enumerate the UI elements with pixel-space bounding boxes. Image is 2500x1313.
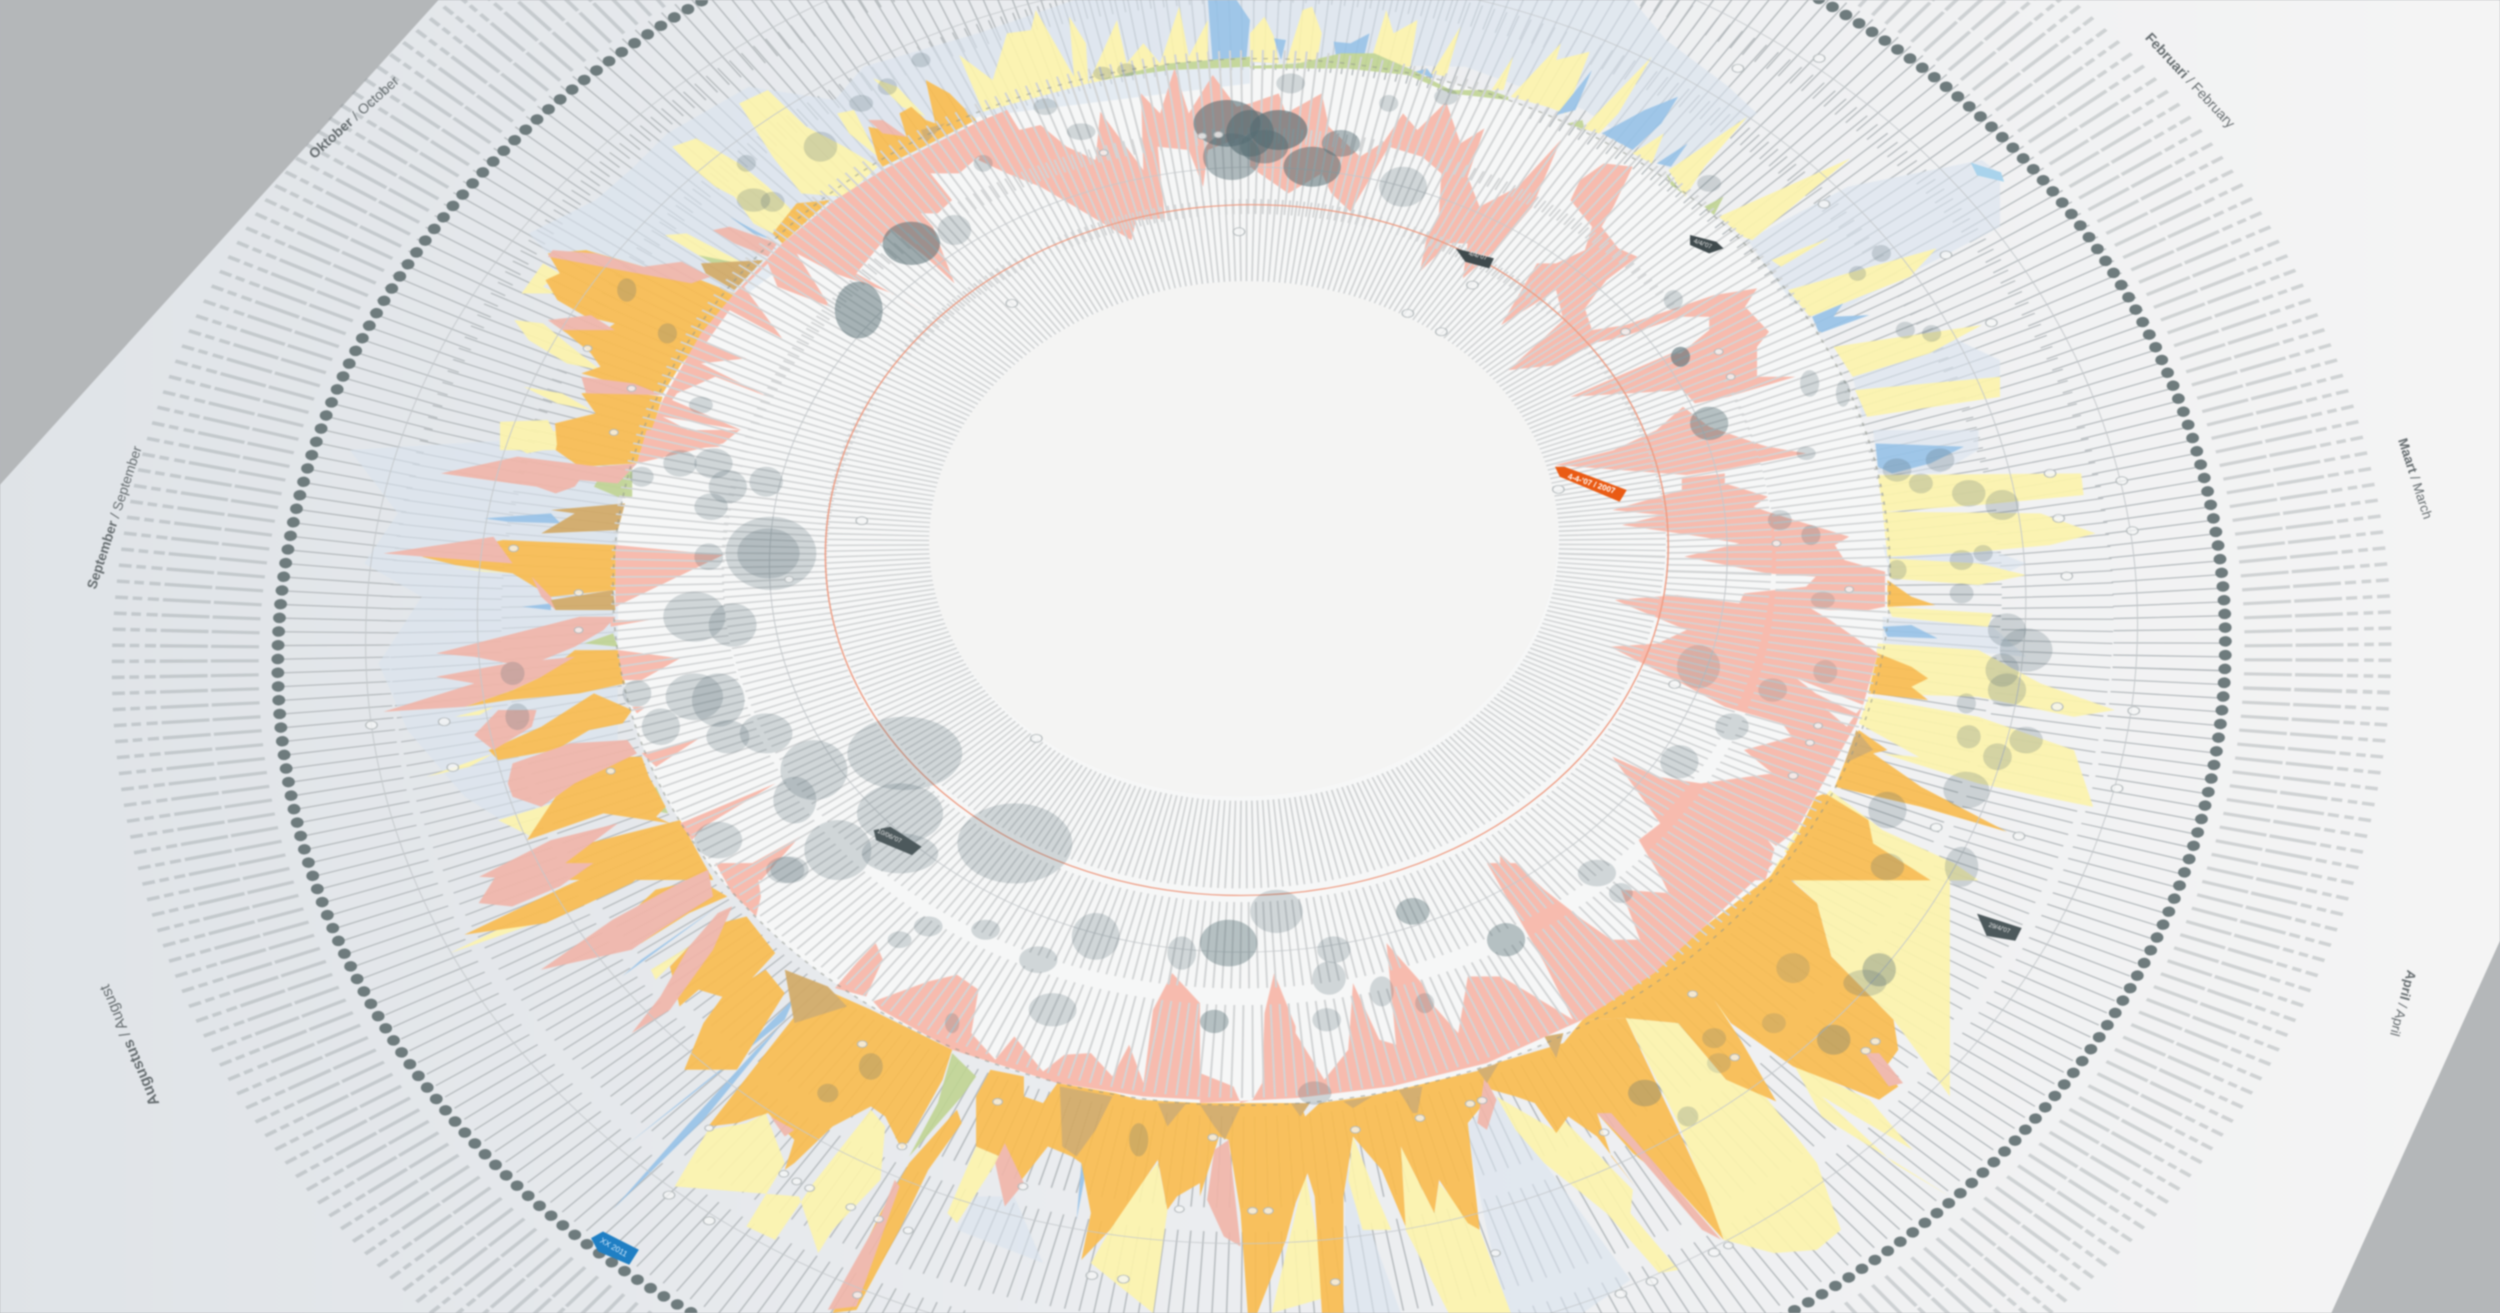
radial day lines: outer zone <box>289 0 2214 1313</box>
inner chart: pink temperature area <box>611 68 1885 1103</box>
month label: Maart: Maart / March <box>2395 436 2435 521</box>
tag: dark lower right <box>1977 914 2022 941</box>
orange series <box>422 80 2007 1313</box>
month label: Oktober: Oktober / October <box>305 72 402 162</box>
month label: April: April / April <box>2387 969 2419 1038</box>
tag: dark top: 4/4/'07 <box>1468 250 1488 262</box>
blue series <box>484 0 1964 1220</box>
tag: dark top <box>1456 248 1494 268</box>
tag: pale blue <box>1971 163 2004 182</box>
outer pink series <box>383 120 1903 1310</box>
month label: Februari: Februari / February <box>2142 29 2238 131</box>
tag: dark top right <box>1690 235 1724 253</box>
tag: dark top right: 4/4/'07 <box>1693 238 1713 251</box>
inner empty disc <box>914 272 1573 806</box>
month label: September: September / September <box>84 444 145 591</box>
yellow series <box>426 7 2115 1313</box>
outer chart: pale blue, yellow, blue, green, orange spikes <box>350 0 2115 1313</box>
grey guide rings <box>322 0 2181 1313</box>
white disc of the inner chart zone <box>582 40 1921 1124</box>
tag: orange record high: 4-4-'07 / 2007 <box>1567 472 1617 496</box>
bubbles: bottom right <box>1200 860 1896 1126</box>
pink: lower left <box>715 863 1200 1100</box>
pink: upper left <box>643 68 1250 450</box>
tag: orange record high <box>1555 467 1627 502</box>
tag: blue <box>591 1231 639 1265</box>
tag: dark left: 10/06/'07 <box>876 828 903 845</box>
pink: right <box>1500 430 1885 880</box>
bubbles: right <box>1660 447 2052 887</box>
tag: dark lower right: 29/4/'07 <box>1988 922 2012 935</box>
bubbles: bottom left <box>770 856 1196 1156</box>
dotted boundary ring <box>582 40 1921 1124</box>
thin red reference ring <box>805 192 1689 908</box>
pale blue series <box>350 0 2026 1313</box>
brown overlap patches <box>541 123 1873 1156</box>
pink: left <box>611 430 800 880</box>
tag: dark left <box>874 827 922 855</box>
green series <box>584 53 1724 1156</box>
small white value markers <box>366 54 2140 1298</box>
pink: upper right <box>1250 93 1795 450</box>
bubbles: top left <box>617 53 1261 413</box>
bubbles: left <box>501 448 1072 883</box>
white wedges cut into the pink <box>1620 678 1864 860</box>
tag: blue: XX 2011 <box>598 1236 629 1259</box>
bubbles <box>501 53 2052 1156</box>
radial day lines: inner zone <box>639 79 1861 1069</box>
pink: lower right <box>1200 863 1774 1103</box>
bubbles: top right <box>1226 73 1941 440</box>
month label: Augustus: Augustus / August <box>96 981 163 1108</box>
